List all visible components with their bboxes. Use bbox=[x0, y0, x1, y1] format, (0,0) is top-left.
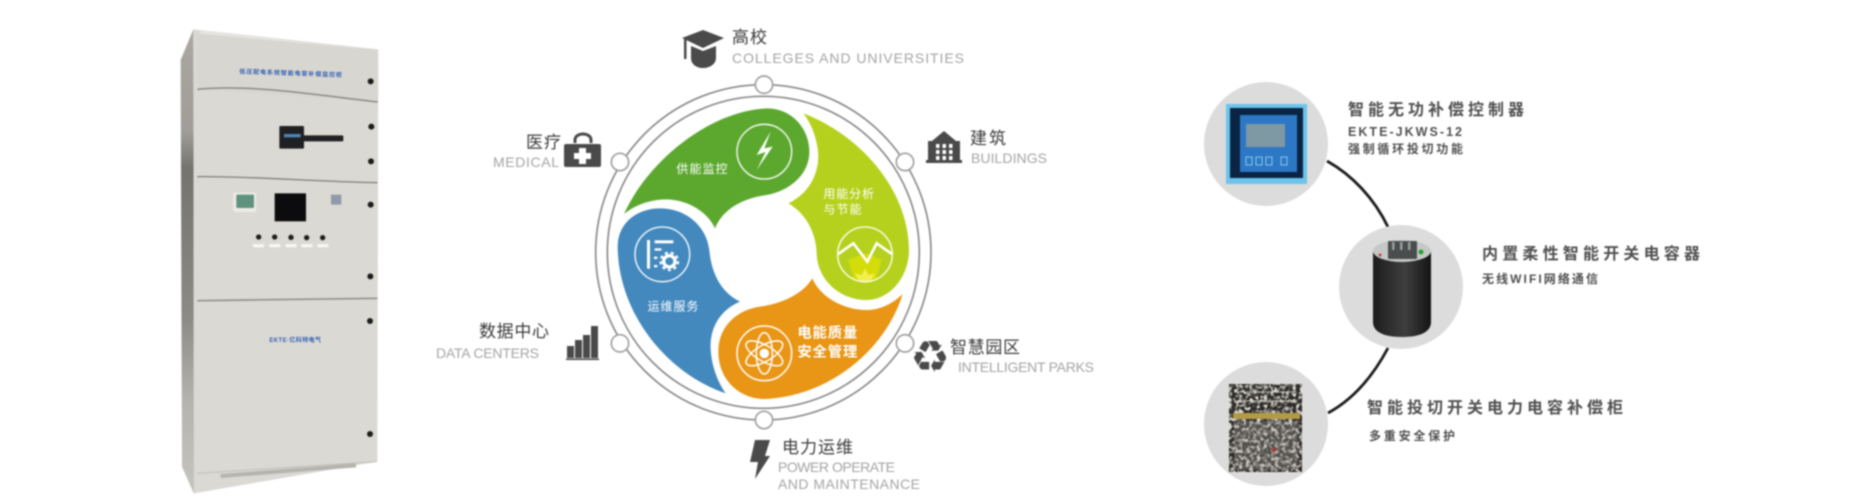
sector: intelligent parks bbox=[910, 332, 1094, 383]
icon: recycle: ♻ bbox=[910, 332, 950, 383]
ring diagram bbox=[596, 76, 931, 429]
cabinet title text: 低压配电系统智能电容补偿监控柜 bbox=[239, 67, 342, 79]
cabinet interior bbox=[1229, 384, 1302, 472]
sector: data centers bbox=[436, 322, 599, 361]
lower section bbox=[1234, 421, 1298, 470]
connector: capacitor to cabinet bbox=[1328, 348, 1388, 413]
heading: colleges: 高校 bbox=[732, 28, 767, 47]
segment: usage analysis bbox=[788, 113, 909, 300]
label: usage analysis and saving: 用能分析 bbox=[823, 187, 874, 201]
label: power operate english: POWER OPERATE bbox=[778, 459, 895, 475]
segment: supply monitoring bbox=[624, 108, 809, 228]
cabinet buttons bbox=[253, 234, 328, 247]
sector: buildings bbox=[926, 129, 1047, 166]
icon: lightning bbox=[750, 440, 770, 479]
heading: intelligent parks: 智慧园区 bbox=[950, 338, 1020, 357]
copper bar bbox=[1233, 413, 1300, 419]
switch handle bbox=[279, 126, 343, 149]
label: and maintenance english: AND MAINTENANCE bbox=[778, 476, 920, 492]
label: power quality and safety management: 安全管理 bbox=[797, 343, 857, 361]
product: compensation cabinet bbox=[1204, 362, 1328, 486]
label: usage analysis and saving: 与节能 bbox=[823, 202, 862, 216]
photo: reactive compensation cabinet bbox=[181, 29, 378, 494]
cabinet meter bbox=[233, 193, 256, 212]
sector: medical bbox=[493, 133, 601, 170]
device display bbox=[1246, 124, 1285, 147]
cabinet door locks bbox=[367, 78, 374, 437]
cap socket bbox=[1388, 241, 1417, 259]
heading: buildings: 建筑 bbox=[970, 129, 1006, 148]
heading: medical: 医疗 bbox=[526, 133, 561, 152]
icon: bar signal bbox=[566, 326, 599, 360]
label: buildings english: BUILDINGS bbox=[971, 150, 1047, 166]
icon: building bbox=[926, 131, 962, 163]
label: colleges english: COLLEGES AND UNIVERSITIES bbox=[732, 50, 964, 66]
segment: power quality bbox=[718, 278, 903, 399]
label: capacitor feature: 无线WIFI网络通信 bbox=[1482, 271, 1598, 286]
circle backdrop bbox=[1339, 225, 1463, 349]
icon: graduation cap bbox=[682, 30, 724, 68]
segment: operation service bbox=[618, 208, 740, 393]
cylinder cap bbox=[1373, 240, 1431, 262]
icon: maintenance gear bbox=[635, 227, 690, 282]
cabinet side panel bbox=[181, 29, 194, 494]
heading: compensation cabinet: 智能投切开关电力电容补偿柜 bbox=[1367, 398, 1623, 417]
label: cabinet feature: 多重安全保护 bbox=[1369, 428, 1455, 443]
label: data centers english: DATA CENTERS bbox=[436, 345, 539, 361]
icon: energy curve bbox=[838, 227, 892, 283]
sector: colleges and universities bbox=[682, 28, 964, 68]
device frame bbox=[1226, 104, 1307, 184]
cabinet brand text: EKTE·亿科特电气 bbox=[269, 336, 321, 344]
label: power quality and safety management bbox=[797, 323, 857, 361]
label: power quality and safety management: 电能质量 bbox=[797, 323, 857, 341]
heading: capacitor: 内置柔性智能开关电容器 bbox=[1482, 244, 1700, 263]
label: medical english: MEDICAL bbox=[493, 154, 559, 170]
connector: controller to capacitor bbox=[1327, 161, 1388, 227]
product: capacitor bbox=[1339, 225, 1463, 349]
label: intelligent parks english: INTELLIGENT PARKS bbox=[958, 359, 1094, 375]
upper bus lines bbox=[1234, 392, 1296, 401]
label: controller model: EKTE-JKWS-12 bbox=[1348, 125, 1462, 139]
label: operation service: 运维服务 bbox=[648, 298, 698, 313]
heading: data centers: 数据中心 bbox=[479, 322, 549, 341]
cabinet front bbox=[193, 29, 378, 493]
device face bbox=[1240, 115, 1297, 172]
ring nodes bbox=[611, 76, 914, 429]
cap indicators bbox=[1418, 250, 1424, 254]
cylinder body bbox=[1373, 252, 1431, 337]
icon: lightning bolt bbox=[737, 124, 792, 179]
label: usage analysis and saving bbox=[823, 187, 874, 216]
cabinet screen bbox=[275, 193, 306, 221]
outer rings bbox=[596, 85, 931, 420]
label: supply monitoring: 供能监控 bbox=[676, 162, 728, 176]
icon: atom bbox=[737, 326, 792, 381]
label: controller feature: 强制循环投切功能 bbox=[1348, 141, 1463, 156]
heading: controller: 智能无功补偿控制器 bbox=[1348, 100, 1524, 119]
heading: power operation: 电力运维 bbox=[782, 438, 853, 457]
icon: medical kit bbox=[564, 134, 601, 167]
cabinet base plate bbox=[221, 465, 356, 476]
circle backdrop bbox=[1204, 362, 1328, 486]
device keys bbox=[1246, 157, 1287, 165]
product: controller bbox=[1204, 82, 1328, 206]
cabinet indicator bbox=[331, 195, 341, 205]
circle backdrop bbox=[1204, 82, 1328, 206]
sector: power operation bbox=[750, 438, 920, 492]
